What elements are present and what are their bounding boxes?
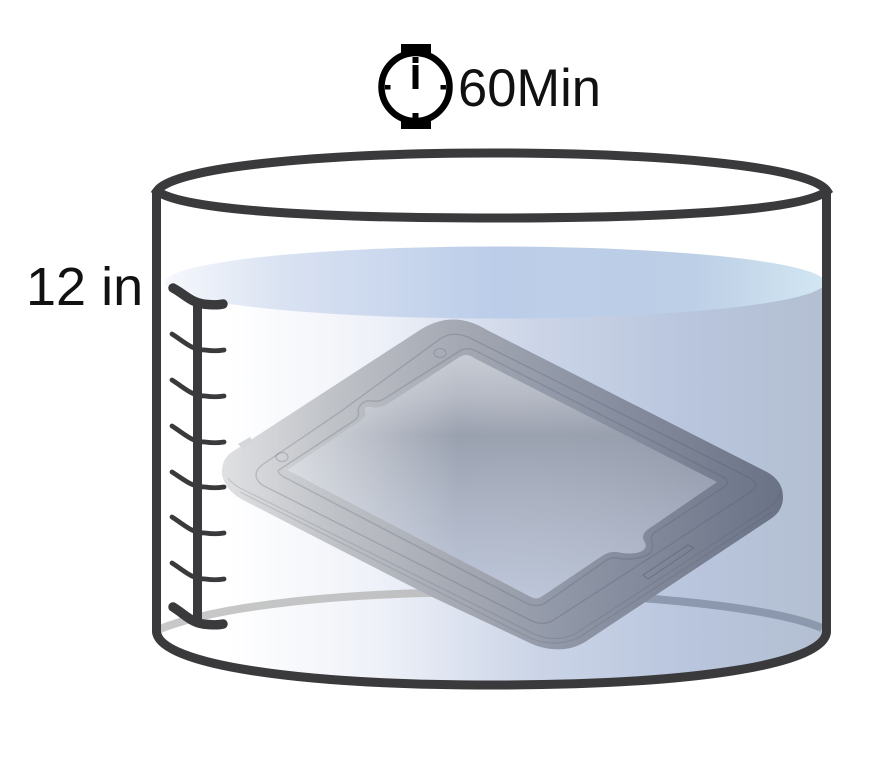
ruler ticks (172, 334, 224, 580)
depth label: 12 in (26, 257, 143, 317)
water body (161, 282, 822, 685)
tablet screen (287, 355, 717, 598)
ruler spine (193, 300, 202, 622)
cylinder walls and base (156, 190, 826, 685)
tablet bezel inner line (278, 349, 727, 606)
icon: stopwatch (382, 44, 450, 129)
tablet shell (222, 320, 783, 649)
tablet edge lines (228, 478, 781, 643)
ruler end caps (173, 288, 223, 625)
tablet bezel outer line (256, 334, 756, 623)
tablet device (222, 320, 783, 649)
tablet screen shading (287, 355, 717, 598)
tablet side button (238, 437, 253, 449)
glass cylinder (156, 153, 827, 685)
water surface (165, 246, 825, 318)
cylinder rim (157, 153, 827, 218)
duration label: 60Min (458, 59, 601, 118)
depth ruler (172, 288, 224, 625)
tablet screws (276, 348, 446, 462)
tank floor back edge (160, 592, 822, 629)
tablet port cover (643, 545, 694, 579)
